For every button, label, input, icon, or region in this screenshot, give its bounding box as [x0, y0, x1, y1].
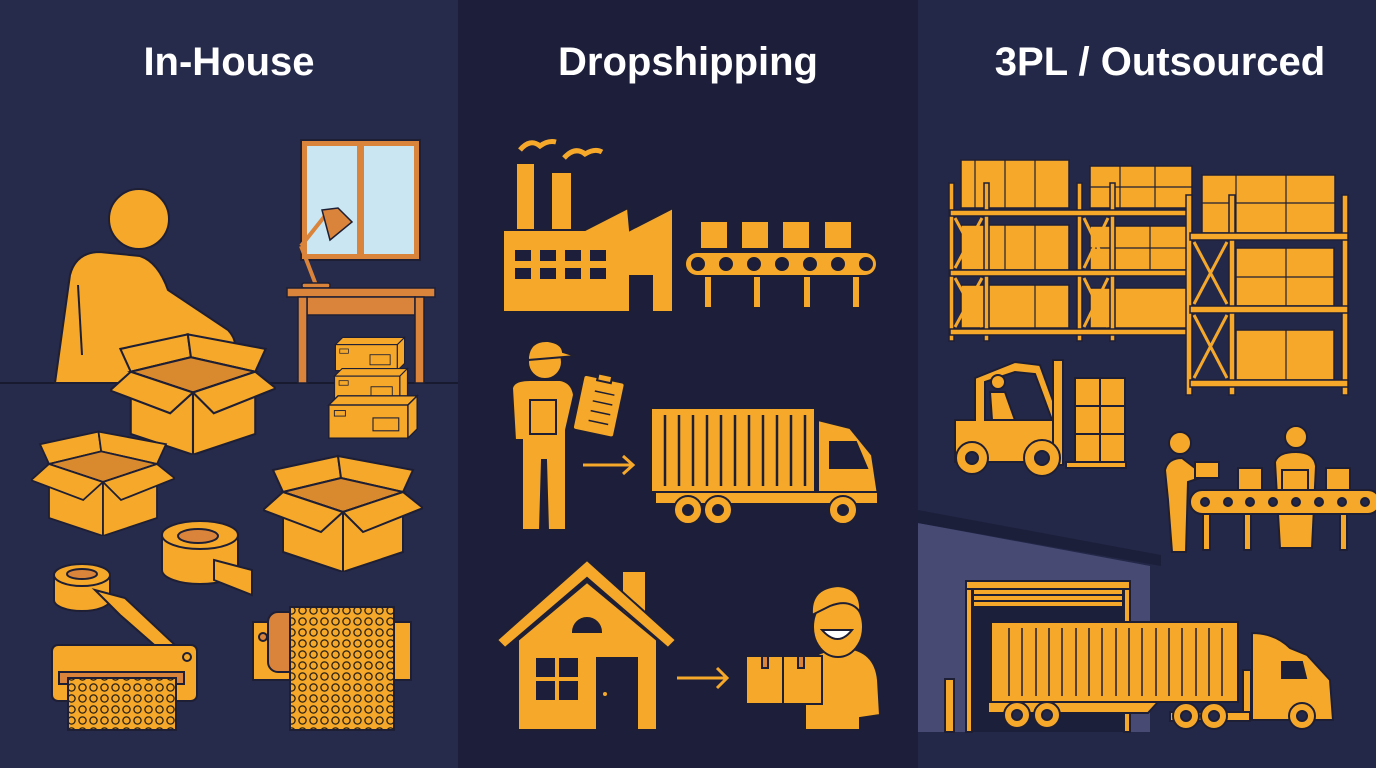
title: Dropshipping: Dropshipping [558, 40, 818, 84]
icon: desk lamp [301, 208, 352, 288]
icon: semi truck [988, 622, 1333, 729]
icon: factory [503, 142, 673, 312]
icon: open box with items [31, 430, 175, 536]
icon: stacked boxes [329, 337, 417, 438]
panel: 3PL background [918, 0, 1376, 768]
icon: house [497, 560, 676, 730]
icon: worker with clipboard [512, 341, 626, 530]
icon: bubble wrap roll [253, 607, 411, 730]
icon: loading dock door [945, 581, 1130, 732]
icon: tape dispenser machine [52, 564, 197, 730]
icon: conveyor with boxes [685, 221, 877, 308]
icon: tape roll [162, 521, 252, 595]
panel: in-house background [0, 0, 458, 768]
panel: dropshipping background [458, 0, 918, 768]
icon: desk [287, 288, 435, 383]
arrow: house to customer [677, 668, 727, 688]
title: 3PL / Outsourced: 3PL / Outsourced [995, 40, 1325, 84]
icon: forklift [955, 360, 1126, 476]
title: In-House: In-House [143, 40, 315, 84]
icon: happy customer with box [746, 586, 880, 730]
icon: window [301, 140, 420, 260]
icon: warehouse building [918, 510, 1161, 732]
icon: warehouse shelving [949, 160, 1348, 395]
icon: person packing [55, 189, 235, 383]
icon: open box being packed [110, 333, 276, 455]
icon: open empty box [263, 455, 423, 572]
icon: workers at conveyor [1165, 426, 1376, 552]
icon: delivery truck [651, 408, 878, 524]
arrow: worker to truck [583, 456, 633, 474]
